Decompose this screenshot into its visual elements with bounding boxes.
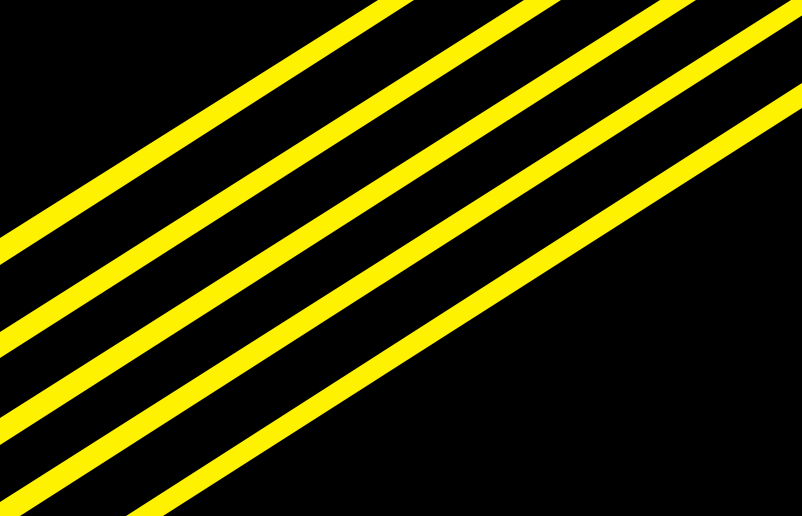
stripe 2 — [0, 0, 561, 358]
stripe 1 — [0, 0, 414, 265]
stripe 5 — [126, 83, 802, 516]
stripe 3 — [0, 0, 696, 445]
